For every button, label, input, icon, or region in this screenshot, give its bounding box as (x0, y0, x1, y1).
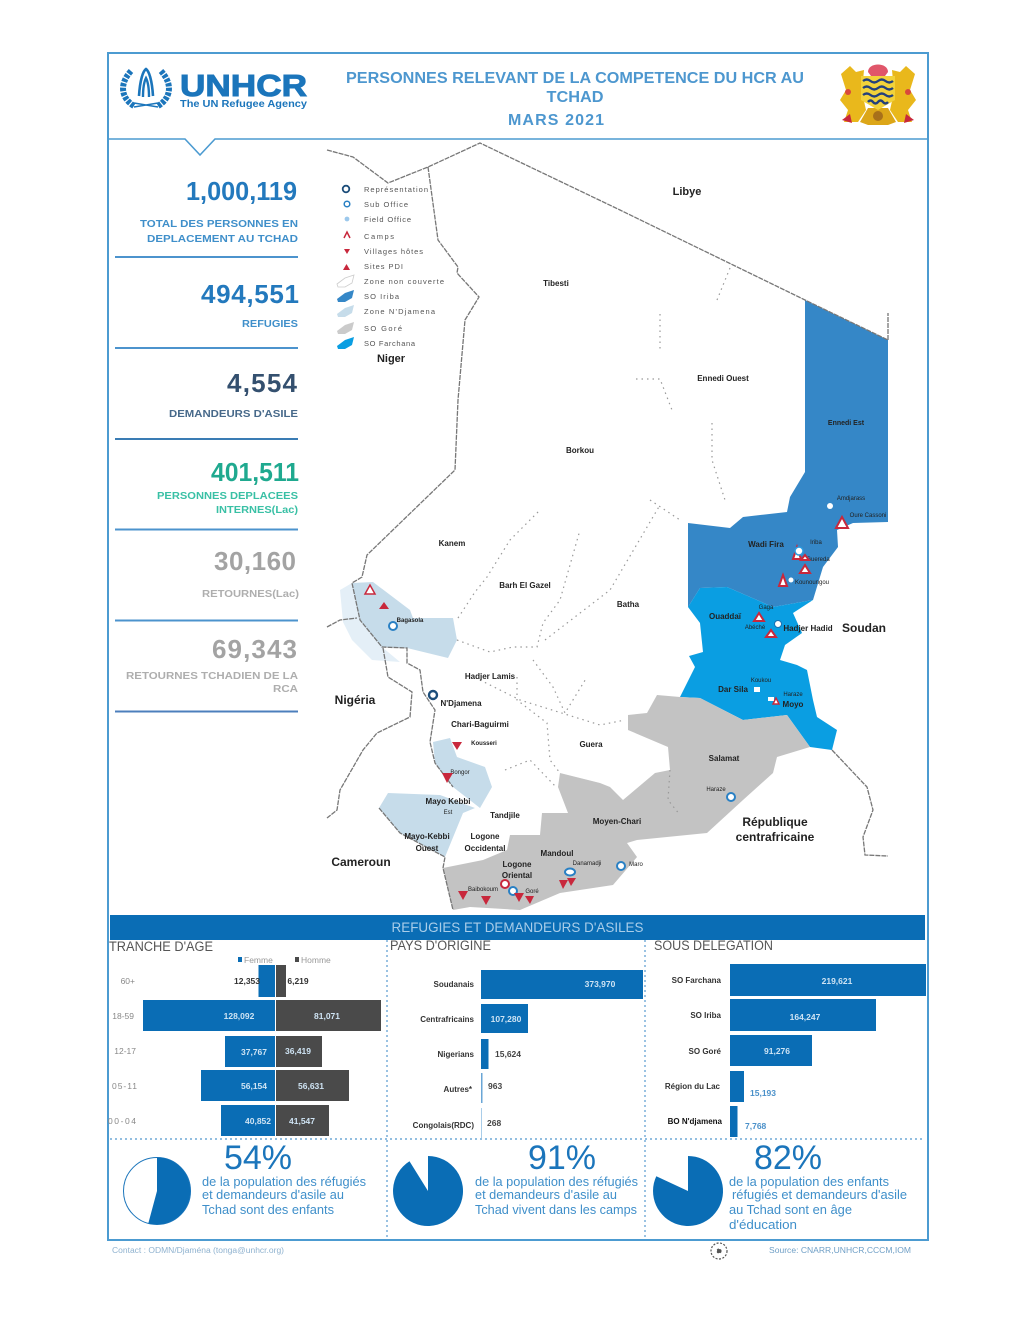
country and region labels: Salamat (709, 754, 740, 763)
country and region labels: centrafricaine (736, 830, 815, 844)
pie chart (124, 1158, 190, 1224)
values (745, 976, 853, 1131)
heading: PAYS D'ORIGINE (390, 938, 491, 953)
legend: labels: Sub Office (364, 200, 408, 209)
header rule with notch (108, 139, 928, 155)
country and region labels: Amdjarass (837, 496, 865, 502)
categories: Région du Lac (665, 1082, 721, 1091)
region: zone N'Djamena, Hadjer-Lamis sud (433, 738, 492, 808)
values: 107,280 (491, 1014, 522, 1024)
bars (481, 970, 643, 1138)
banner: refugees and asylum seekers (110, 915, 925, 940)
figure: asylum seekers (169, 368, 298, 420)
description: de la population des enfants (729, 1175, 889, 1189)
values: 7,768 (745, 1121, 767, 1131)
value labels: 56,154 (241, 1081, 267, 1091)
country and region labels: Oriental (502, 871, 532, 880)
stat: 54% children (124, 1139, 366, 1224)
country and region labels: Dar Sila (718, 685, 748, 694)
tagline: The UN Refugee Agency (180, 99, 307, 110)
map of Chad (327, 143, 888, 910)
country and region labels: Iriba (810, 540, 822, 546)
figure: returnees CAR (126, 634, 298, 695)
pie chart (653, 1156, 723, 1226)
figure: total: TOTAL DES PERSONNES EN (140, 218, 298, 230)
values: 164,247 (790, 1012, 821, 1022)
heading: TRANCHE D'AGE (109, 939, 213, 954)
country and region labels: Est (444, 810, 453, 816)
values: 91,276 (764, 1046, 790, 1056)
country and region labels: Bagasola (397, 618, 424, 624)
country and region labels: Mayo Kebbi (426, 797, 470, 806)
country and region labels (331, 186, 886, 895)
country and region labels: Tandjile (490, 811, 520, 820)
country and region labels: Baibokoum (468, 887, 498, 893)
categories: SO Goré (689, 1047, 722, 1056)
legend: labels: Field Office (364, 215, 411, 224)
value labels: 36,419 (285, 1046, 311, 1056)
categories: BO N'djamena (668, 1117, 723, 1126)
stat: 91% in camps (393, 1139, 638, 1226)
country and region labels: Hadjer Hadid (783, 624, 833, 633)
region: zone N'Djamena, Mayo-Kebbi (379, 793, 475, 857)
country and region labels: Soudan (842, 621, 886, 635)
figure: refugees (201, 279, 299, 330)
values: 373,970 (585, 979, 616, 989)
values: 268 (487, 1118, 501, 1128)
legend: area swatches (337, 275, 354, 349)
values: 15,193 (750, 1088, 776, 1098)
legend: labels: Sites PDI (364, 262, 403, 271)
figure: refugees: 494,551 (201, 279, 299, 309)
country and region labels: Koukou (751, 678, 771, 684)
title (346, 70, 804, 129)
values: 963 (488, 1081, 502, 1091)
title: PERSONNES RELEVANT DE LA COMPETENCE DU HCR AU (346, 70, 804, 87)
heading: SOUS DELEGATION (654, 938, 773, 953)
figure: internally displaced: PERSONNES DEPLACEES (157, 490, 298, 502)
figure: returnees CAR: 69,343 (212, 634, 297, 664)
percentage: 82% (754, 1139, 822, 1177)
country and region labels: Logone (503, 860, 532, 869)
markers: camps, offices and host villages (365, 503, 848, 905)
country and region labels: Ouaddaï (709, 612, 742, 621)
country and region labels: Goré (525, 889, 539, 895)
chart legend: Femme (244, 955, 273, 965)
country and region labels: Occidental (465, 844, 505, 853)
value labels: 81,071 (314, 1011, 340, 1021)
figure: refugees: REFUGIES (242, 318, 298, 330)
chart: country of origin (390, 938, 643, 1138)
legend: labels: SO Iriba (364, 292, 400, 301)
title: MARS 2021 (508, 112, 604, 129)
age labels (108, 976, 137, 1126)
bars: male (276, 965, 381, 1136)
description: de la population des réfugiés (202, 1175, 366, 1189)
percentage: 54% (224, 1139, 292, 1177)
figure: asylum seekers: DEMANDEURS D'ASILE (169, 408, 298, 420)
country and region labels: Ennedi Est (828, 420, 865, 427)
value labels: 6,219 (287, 976, 309, 986)
categories: Soudanais (434, 980, 475, 989)
age labels: 18-59 (112, 1011, 134, 1021)
figure: internally displaced: 401,511 (211, 457, 299, 487)
country and region labels: Logone (471, 832, 500, 841)
country and region labels: Wadi Fira (748, 540, 784, 549)
figure: total: 1,000,119 (186, 176, 297, 206)
country and region labels: Borkou (566, 446, 594, 455)
chart: sub-delegation (654, 938, 926, 1137)
value labels (224, 976, 340, 1126)
title: TCHAD (546, 89, 604, 106)
country and region labels: Chari-Baguirmi (451, 720, 509, 729)
legend: labels: Représentation (364, 185, 428, 194)
age labels: 60+ (121, 976, 135, 986)
country and region labels: Gaga (759, 605, 774, 611)
description (475, 1175, 638, 1217)
country and region labels: Mandoul (541, 849, 573, 858)
country and region labels: Nigéria (335, 693, 376, 707)
bars (730, 964, 926, 1137)
values (487, 979, 616, 1128)
country and region labels: Abéché (745, 625, 766, 631)
description (202, 1175, 366, 1217)
country and region labels: Haraze (706, 787, 726, 793)
age labels: 05-11 (112, 1081, 137, 1091)
value labels: 40,852 (245, 1116, 271, 1126)
country and region labels: Danamadji (573, 861, 601, 867)
banner: refugees and asylum seekers: REFUGIES ET DEMANDEURS D'ASILES (392, 919, 644, 935)
description (729, 1175, 907, 1232)
outer frame (108, 53, 928, 1240)
region: SO Iriba (688, 300, 888, 607)
internal region boundaries (457, 268, 730, 815)
value labels: 37,767 (241, 1047, 267, 1057)
country and region labels: Batha (617, 600, 640, 609)
percentage: 91% (528, 1139, 596, 1177)
categories: Congolais(RDC) (413, 1121, 474, 1130)
description: au Tchad sont en âge (729, 1203, 852, 1217)
values: 15,624 (495, 1049, 521, 1059)
country and region labels: Guera (579, 740, 603, 749)
description: d'éducation (729, 1218, 797, 1232)
figure: returnees Lac (202, 546, 299, 600)
figure: total: DEPLACEMENT AU TCHAD (147, 233, 298, 245)
country and region labels: Ouest (416, 844, 439, 853)
value labels: 56,631 (298, 1081, 324, 1091)
country and region labels: Moyo (783, 700, 804, 709)
legend: labels: SO Goré (364, 324, 402, 333)
figure: returnees Lac: 30,160 (214, 546, 296, 576)
value labels: 12,353 (234, 976, 260, 986)
figure: returnees CAR: RETOURNES TCHADIEN DE LA (126, 670, 298, 682)
country and region labels: N'Djamena (440, 699, 482, 708)
description: et demandeurs d'asile au (475, 1188, 617, 1202)
country and region labels: Guereda (806, 557, 830, 563)
icon: partner emblem (711, 1243, 727, 1259)
legend: labels: Zone non couverte (364, 277, 444, 286)
legend: labels: SO Farchana (364, 339, 416, 348)
values: 219,621 (822, 976, 853, 986)
description: de la population des réfugiés (475, 1175, 638, 1189)
country and region labels: Mayo-Kebbi (404, 832, 450, 841)
figure: total (140, 176, 298, 245)
country and region labels: Bongor (450, 770, 470, 776)
country and region labels: Haraze (783, 692, 803, 698)
region: SO Goré (443, 695, 810, 910)
country and region labels: Hadjer Lamis (465, 672, 516, 681)
description: réfugiés et demandeurs d'asile (732, 1188, 907, 1202)
wordmark: UNHCR (180, 68, 307, 103)
region: zone N'Djamena, Lac (352, 582, 457, 658)
footer: source: Source: CNARR,UNHCR,CCCM,IOM (769, 1246, 911, 1255)
bars: female (143, 965, 275, 1136)
chart: age pyramid (108, 939, 381, 1136)
country and region labels: Kanem (439, 539, 465, 548)
description: et demandeurs d'asile au (202, 1188, 344, 1202)
figure: returnees CAR: RCA (273, 683, 298, 695)
value labels: 128,092 (224, 1011, 255, 1021)
country and region labels: Maro (629, 862, 643, 868)
country and region labels: Ennedi Ouest (697, 374, 749, 383)
figure: returnees Lac: RETOURNES(Lac) (202, 588, 299, 600)
legend: labels: Zone N'Djamena (364, 307, 436, 316)
country and region labels: Tibesti (543, 279, 569, 288)
legend: labels: Villages hôtes (364, 247, 423, 256)
icon: coat of arms of Chad (840, 64, 916, 125)
country and region labels: Cameroun (331, 855, 391, 869)
stat: 82% school age (653, 1139, 907, 1232)
region: lake texture (340, 583, 400, 662)
legend: labels (364, 185, 444, 348)
legend: labels: Camps (364, 232, 394, 241)
value labels: 41,547 (289, 1116, 315, 1126)
country and region labels: Moyen-Chari (593, 817, 641, 826)
description: Tchad vivent dans les camps (475, 1203, 637, 1217)
country and region labels: Libye (673, 186, 701, 198)
country and region labels: Kousseri (471, 741, 497, 747)
age labels: 12-17 (114, 1046, 136, 1056)
categories: Centrafricains (420, 1015, 475, 1024)
international borders (327, 143, 888, 910)
country and region labels: Kounoungou (795, 580, 829, 586)
categories: SO Iriba (690, 1011, 722, 1020)
legend (337, 185, 444, 349)
age labels: 00-04 (108, 1116, 136, 1126)
pie chart (393, 1156, 463, 1226)
region: SO Farchana (680, 587, 837, 750)
description: Tchad sont des enfants (202, 1203, 334, 1217)
panel: key figures (126, 176, 299, 695)
categories: SO Farchana (672, 976, 722, 985)
chart legend (238, 955, 331, 965)
country and region labels: Niger (377, 353, 406, 365)
figure: internally displaced (157, 457, 299, 516)
icon: laurel and figure (123, 69, 169, 107)
categories: Nigerians (438, 1050, 475, 1059)
categories: Autres* (444, 1085, 473, 1094)
country and region labels: République (742, 815, 808, 829)
categories (413, 980, 475, 1130)
legend: office symbols (343, 186, 350, 270)
country and region labels: Oure Cassoni (850, 513, 886, 519)
figure: asylum seekers: 4,554 (227, 368, 298, 398)
footer: contact: Contact : ODMN/Djaména (tonga@unhcr.org) (112, 1246, 284, 1255)
chart legend: Homme (301, 955, 331, 965)
figure: internally displaced: INTERNES(Lac) (216, 504, 298, 516)
categories (665, 976, 723, 1126)
UNHCR logo (123, 68, 307, 110)
country and region labels: Barh El Gazel (499, 581, 551, 590)
